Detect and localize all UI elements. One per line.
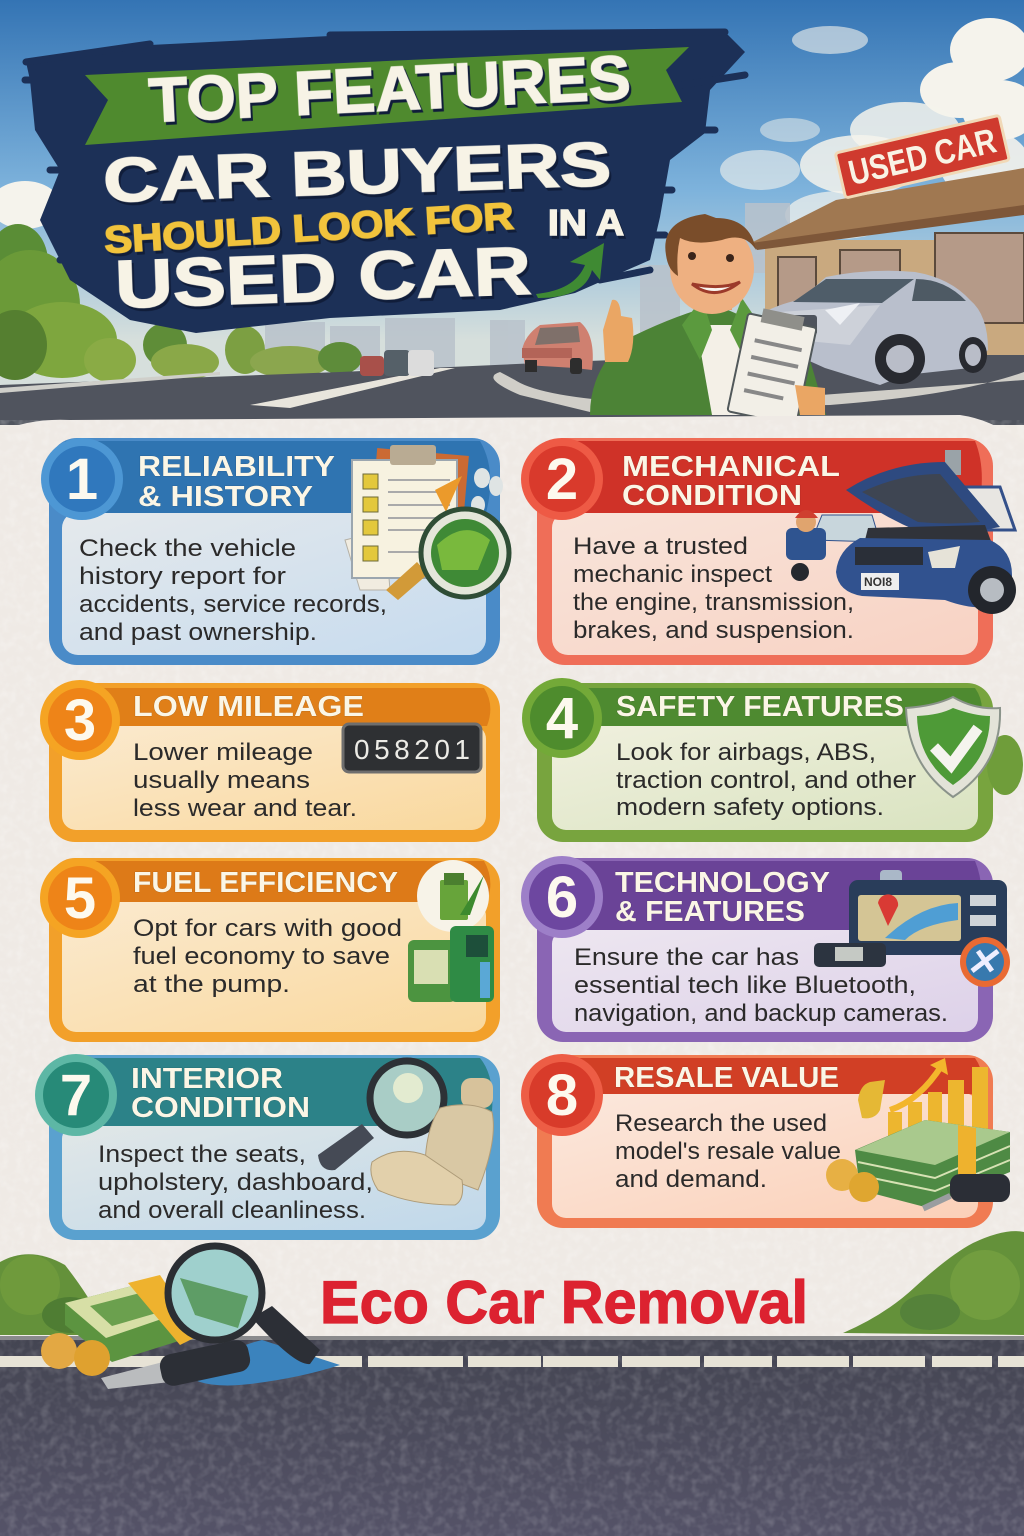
heading: SAFETY FEATURES bbox=[616, 691, 904, 723]
number badge 5 bbox=[40, 858, 120, 938]
heading: CONDITION bbox=[622, 480, 802, 512]
icon: navigation screen bbox=[814, 870, 1010, 987]
heading bbox=[131, 1063, 310, 1124]
body text: less wear and tear. bbox=[133, 795, 357, 822]
body text: Opt for cars with good bbox=[133, 915, 402, 942]
panel: 6 technology and features bbox=[521, 856, 1010, 1042]
body text: upholstery, dashboard, bbox=[98, 1169, 373, 1196]
body text bbox=[616, 739, 916, 821]
body text bbox=[615, 1110, 841, 1193]
panel: 3 low mileage bbox=[40, 680, 500, 842]
icon: clipboard and magnifier bbox=[345, 445, 509, 600]
body text: usually means bbox=[133, 767, 310, 794]
red car in distance bbox=[522, 322, 593, 374]
body text: Research the used bbox=[615, 1110, 827, 1137]
body text: model's resale value bbox=[615, 1138, 841, 1165]
distant skyline bbox=[265, 203, 790, 370]
heading bbox=[622, 451, 840, 512]
icon: odometer bbox=[343, 724, 481, 772]
icon: odometer: 058201 bbox=[354, 734, 470, 765]
icon: seat and magnifier bbox=[318, 1061, 493, 1205]
body text bbox=[133, 739, 357, 822]
header scene bbox=[0, 0, 1024, 425]
title: SHOULD LOOK FOR bbox=[103, 196, 515, 262]
silver car bbox=[763, 271, 988, 385]
number badge 2: 2 bbox=[546, 447, 578, 512]
panel: 2 mechanical condition bbox=[521, 438, 1016, 665]
man with clipboard bbox=[590, 214, 826, 426]
number badge 3: 3 bbox=[64, 688, 96, 753]
body text: brakes, and suspension. bbox=[573, 617, 854, 644]
clipboard bbox=[727, 305, 818, 426]
title bbox=[85, 44, 689, 323]
body text: at the pump. bbox=[133, 971, 290, 998]
body text: Have a trusted bbox=[573, 533, 748, 560]
heading: CONDITION bbox=[131, 1092, 310, 1124]
body text: and past ownership. bbox=[79, 619, 317, 646]
body text: and demand. bbox=[615, 1166, 767, 1193]
heading: & FEATURES bbox=[615, 896, 805, 928]
heading: MECHANICAL bbox=[622, 451, 840, 483]
number badge 6 bbox=[521, 856, 603, 938]
title: IN A bbox=[548, 202, 624, 243]
panel: 5 fuel efficiency bbox=[40, 858, 500, 1042]
number badge 6: 6 bbox=[546, 865, 578, 930]
panel: 1 reliability and history bbox=[41, 438, 509, 665]
body text bbox=[573, 533, 854, 644]
body text: fuel economy to save bbox=[133, 943, 390, 970]
bushes bbox=[0, 1231, 1024, 1335]
heading: RESALE VALUE bbox=[614, 1062, 839, 1094]
building: used car dealership bbox=[751, 115, 1024, 355]
icon: shield bbox=[906, 697, 1023, 797]
body text bbox=[79, 535, 387, 646]
panel: 4 safety features bbox=[522, 678, 1023, 842]
green arrow bbox=[536, 243, 604, 298]
number badge 1: 1 bbox=[66, 447, 98, 512]
heading: FUEL EFFICIENCY bbox=[133, 867, 398, 899]
title: CAR BUYERS bbox=[102, 130, 612, 216]
green banner bbox=[85, 47, 689, 145]
number badge 3 bbox=[40, 680, 120, 760]
panel: 7 interior condition bbox=[35, 1054, 500, 1240]
body text: navigation, and backup cameras. bbox=[574, 1000, 948, 1027]
road bbox=[0, 345, 1024, 425]
clouds bbox=[0, 18, 1024, 239]
number badge 7: 7 bbox=[60, 1063, 92, 1128]
number badge 1 bbox=[41, 438, 123, 520]
body text bbox=[133, 915, 402, 998]
heading: RELIABILITY bbox=[138, 451, 335, 483]
bottom road bbox=[0, 1336, 1024, 1536]
number badge 8 bbox=[521, 1054, 603, 1136]
body text: history report for bbox=[79, 563, 286, 590]
icon: fuel pump bbox=[408, 860, 494, 1002]
body text: Inspect the seats, bbox=[98, 1141, 306, 1168]
heading bbox=[138, 451, 335, 513]
body text: mechanic inspect bbox=[573, 561, 772, 588]
kerb dashes bbox=[0, 1356, 1024, 1367]
heading: & HISTORY bbox=[138, 481, 313, 513]
body text: the engine, transmission, bbox=[573, 589, 854, 616]
icon: car with open hood and mechanic: NOI8 bbox=[864, 575, 892, 589]
heading: LOW MILEAGE bbox=[133, 691, 364, 723]
number badge 4 bbox=[522, 678, 602, 758]
body text: accidents, service records, bbox=[79, 591, 387, 618]
distant cars bbox=[360, 350, 434, 376]
heading: TECHNOLOGY bbox=[615, 867, 830, 899]
panel: 8 resale value bbox=[521, 1054, 1010, 1228]
icon: money and chart bbox=[826, 1058, 1010, 1211]
body text: essential tech like Bluetooth, bbox=[574, 972, 916, 999]
thumbs up bbox=[603, 300, 633, 362]
heading bbox=[615, 867, 830, 928]
body text: modern safety options. bbox=[616, 794, 884, 821]
title: TOP FEATURES bbox=[147, 44, 632, 136]
body text: Lower mileage bbox=[133, 739, 313, 766]
icon: car with open hood and mechanic bbox=[786, 450, 1016, 614]
body text bbox=[574, 944, 948, 1027]
navy brush-stroke title backdrop bbox=[25, 32, 745, 333]
icon: money magnifier keys bbox=[41, 1246, 340, 1389]
number badge 5: 5 bbox=[64, 866, 96, 931]
number badge 2 bbox=[521, 438, 603, 520]
number badge 7 bbox=[35, 1054, 117, 1136]
logo: Eco Car Removal: Eco Car Removal bbox=[320, 1269, 808, 1336]
title: USED CAR bbox=[114, 233, 532, 323]
left trees bbox=[0, 224, 362, 382]
body text: Check the vehicle bbox=[79, 535, 296, 562]
body text: Look for airbags, ABS, bbox=[616, 739, 876, 766]
body text: and overall cleanliness. bbox=[98, 1197, 366, 1224]
number badge 4: 4 bbox=[546, 686, 578, 751]
body text bbox=[98, 1141, 373, 1224]
body text: traction control, and other bbox=[616, 767, 916, 794]
number badge 8: 8 bbox=[546, 1063, 578, 1128]
heading: INTERIOR bbox=[131, 1063, 283, 1095]
body text: Ensure the car has bbox=[574, 944, 799, 971]
paper content background bbox=[0, 415, 1024, 1340]
